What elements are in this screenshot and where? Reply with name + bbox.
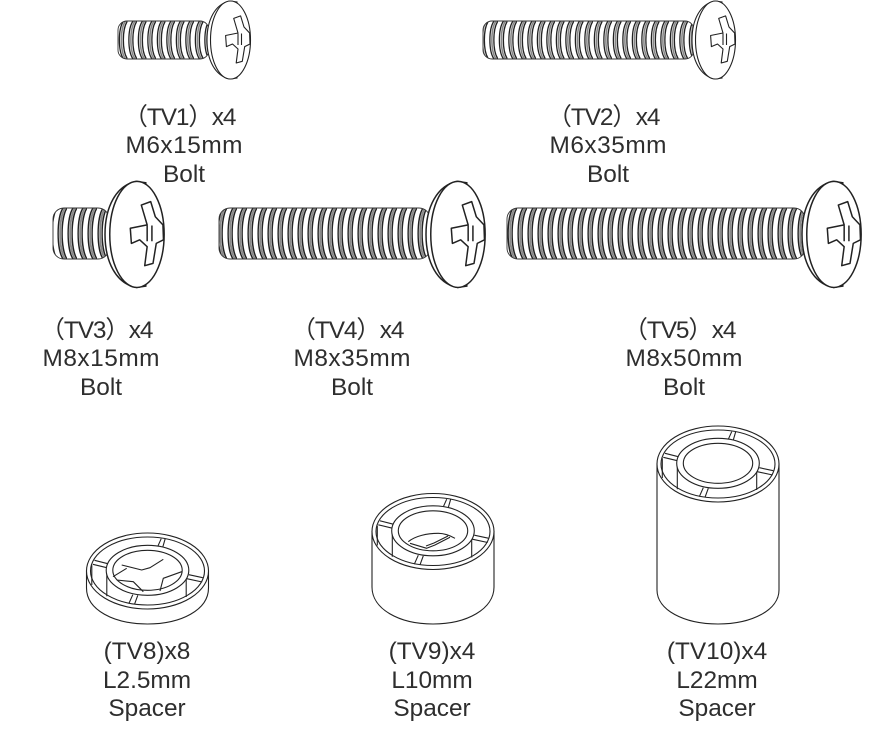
label: TV5	[624, 317, 742, 401]
label: TV8: Spacer	[108, 695, 186, 722]
bolt: TV5 M8x50mm	[507, 181, 861, 287]
label: TV9: (TV9)x4	[389, 638, 475, 665]
label: TV3: M8x15mm	[42, 345, 160, 372]
label: TV10	[667, 638, 767, 722]
label: TV5: Bolt	[663, 374, 705, 401]
label: TV8	[103, 638, 191, 722]
label: TV2: M6x35mm	[550, 132, 666, 159]
label: TV1: Bolt	[163, 161, 205, 188]
label: TV5: （TV5）x4	[624, 317, 736, 344]
bolt: TV1 M6x15mm	[118, 1, 250, 79]
label: TV2: （TV2）x4	[548, 104, 660, 131]
spacer: TV9 L10mm	[372, 494, 494, 624]
label: TV8: L2.5mm	[103, 667, 191, 694]
label: TV4: Bolt	[331, 374, 373, 401]
label: TV3	[40, 317, 160, 401]
bolt: TV4 M8x35mm	[219, 181, 485, 287]
label: TV9	[389, 638, 475, 722]
bolt: TV3 M8x15mm	[53, 181, 164, 287]
label: TV4	[292, 317, 410, 401]
label: TV1: （TV1）x4	[124, 104, 236, 131]
label: TV5: M8x50mm	[626, 345, 742, 372]
label: TV8: (TV8)x8	[104, 638, 190, 665]
label: TV1	[124, 104, 242, 188]
label: TV10: L22mm	[676, 667, 758, 694]
label: TV9: Spacer	[393, 695, 471, 722]
spacer: TV8 L2.5mm	[86, 533, 208, 624]
label: TV3: （TV3）x4	[40, 317, 154, 344]
bolt: TV2 M6x35mm	[483, 1, 736, 79]
label: TV2: Bolt	[587, 161, 629, 188]
label: TV10: Spacer	[678, 695, 756, 722]
spacer: TV10 L22mm	[657, 426, 779, 624]
label: TV4: M8x35mm	[294, 345, 410, 372]
label: TV2	[548, 104, 666, 188]
label: TV3: Bolt	[80, 374, 122, 401]
label: TV9: L10mm	[391, 667, 473, 694]
label: TV1: M6x15mm	[126, 132, 242, 159]
label: TV4: （TV4）x4	[292, 317, 404, 344]
label: TV10: (TV10)x4	[667, 638, 767, 665]
